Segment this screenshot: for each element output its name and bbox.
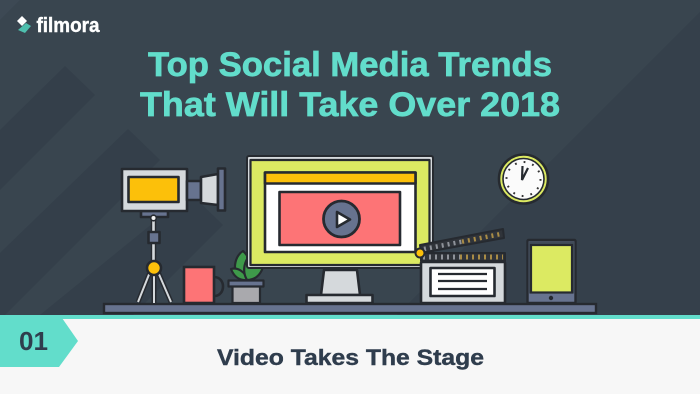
bottom banner (0, 315, 700, 394)
logo: filmora: filmora (36, 15, 100, 37)
title: That Will Take Over 2018 (140, 86, 560, 124)
section heading: Video Takes The Stage (217, 345, 484, 370)
number tab: 01 (19, 326, 48, 356)
icon: tablet (528, 240, 576, 303)
icon: potted plant (228, 247, 264, 303)
camera body (122, 169, 187, 211)
shelf (104, 304, 596, 313)
title: Top Social Media Trends (148, 46, 552, 84)
icon: video camera on tripod (122, 168, 225, 303)
icon: desktop monitor with video player (247, 156, 433, 303)
number tab (0, 318, 78, 367)
tripod (138, 211, 171, 303)
play button (324, 201, 360, 237)
icon: clapperboard (416, 229, 505, 303)
icon: coffee mug (184, 267, 223, 303)
title (140, 46, 560, 124)
icon: wall clock (499, 154, 548, 204)
